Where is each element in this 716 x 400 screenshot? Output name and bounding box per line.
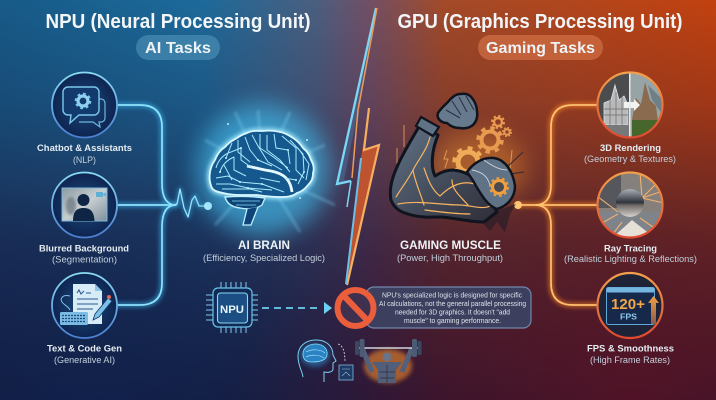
- brain cerebrum: [210, 131, 314, 197]
- label: AI brain: [203, 240, 325, 263]
- central lightning bolts: [336, 6, 379, 285]
- icon: glowing AI brain: [197, 104, 335, 236]
- AI Tasks pill: [136, 35, 220, 60]
- connector: gaming tasks to muscle: [514, 105, 597, 305]
- NPU heading: NPU (Neural Processing Unit): [46, 11, 310, 33]
- icon: NPU chip: NPU: [220, 304, 244, 316]
- task: ray tracing: [564, 172, 697, 264]
- label: FPS and smoothness: [587, 344, 674, 365]
- label: 3D rendering: [584, 143, 676, 164]
- callout: why NPU does not help gaming: NPU's specialized logic is designed for specific: [382, 290, 522, 300]
- label: text and code gen: (Generative AI): [54, 355, 115, 365]
- robotic shoulder: [467, 158, 515, 209]
- icon: prohibition sign: [338, 290, 374, 326]
- label: blurred background: (Segmentation): [52, 254, 117, 264]
- image: wireframe to textured castle: [597, 72, 663, 138]
- icon: 120+ FPS window: 120+: [611, 296, 645, 313]
- label: AI brain: (Efficiency, Specialized Logic): [203, 253, 325, 263]
- GPU heading: GPU (Graphics Processing Unit): [398, 11, 682, 33]
- connector: AI tasks to brain: [118, 105, 212, 305]
- gears: [454, 116, 511, 176]
- label: ray tracing: Ray Tracing: [604, 244, 657, 254]
- label: gaming muscle: GAMING MUSCLE: [400, 240, 501, 252]
- icon: video frame with person: [52, 172, 117, 238]
- label: FPS and smoothness: (High Frame Rates): [590, 355, 670, 365]
- callout: why NPU does not help gaming: needed for 3D graphics. It doesn't "add: [395, 308, 510, 316]
- fist: [438, 94, 477, 128]
- label: gaming muscle: (Power, High Throughput): [397, 253, 503, 263]
- label: gaming muscle: [397, 240, 503, 263]
- task: 3D rendering: [584, 72, 676, 164]
- AI Tasks pill: AI Tasks: [145, 40, 211, 57]
- icon: brain in head with puzzle: [298, 340, 353, 382]
- callout: why NPU does not help gaming: [366, 287, 531, 328]
- label: 3D rendering: 3D Rendering: [600, 143, 661, 153]
- icon: chat bubbles with gear: [52, 72, 117, 138]
- label: ray tracing: [564, 244, 697, 264]
- label: text and code gen: [47, 344, 122, 365]
- label: 3D rendering: (Geometry & Textures): [584, 154, 676, 164]
- label: blurred background: [39, 244, 129, 264]
- image: chrome sphere with light rays: [597, 172, 668, 238]
- wrist cuff: [416, 117, 439, 136]
- label: text and code gen: Text & Code Gen: [47, 344, 122, 354]
- task: chatbot and assistants: [37, 72, 132, 165]
- icon: NPU chip: [206, 282, 258, 333]
- task: text and code generation: [47, 273, 122, 365]
- Gaming Tasks pill: [478, 35, 603, 60]
- glow behind gears: [430, 132, 526, 204]
- label: blurred background: Blurred Background: [39, 244, 129, 254]
- dark mechanical spikes: [506, 152, 524, 174]
- veins: [396, 137, 490, 214]
- label: AI brain: AI BRAIN: [238, 240, 290, 252]
- brain cerebellum and stem: [225, 196, 265, 209]
- icon: 120+ FPS window: FPS: [620, 312, 637, 322]
- brain circuit traces: [216, 134, 309, 192]
- callout: why NPU does not help gaming: muscle" to gaming performance.: [404, 316, 501, 325]
- label: FPS and smoothness: FPS & Smoothness: [587, 344, 674, 354]
- shoulder gear: [492, 180, 506, 194]
- arm: [390, 125, 497, 222]
- icon: document, keyboard and pencil: [52, 273, 117, 338]
- task: FPS and smoothness: [587, 273, 674, 365]
- brain trace nodes: [219, 147, 305, 189]
- label: chatbot: Chatbot & Assistants: [37, 143, 132, 153]
- icon: 120+ FPS window: [598, 273, 662, 338]
- callout: why NPU does not help gaming: AI calculations, not the general parallel processing: [379, 299, 526, 308]
- label: chatbot: (NLP): [73, 155, 96, 165]
- label: chatbot: [37, 143, 132, 165]
- label: ray tracing: (Realistic Lighting & Reflections): [564, 254, 697, 264]
- Gaming Tasks pill: Gaming Tasks: [486, 40, 595, 57]
- flexed gaming muscle: [390, 94, 526, 232]
- arrow: NPU to blocked sign: [262, 302, 332, 314]
- task: blurred background: [39, 172, 129, 264]
- icon: weightlifter: [355, 339, 422, 383]
